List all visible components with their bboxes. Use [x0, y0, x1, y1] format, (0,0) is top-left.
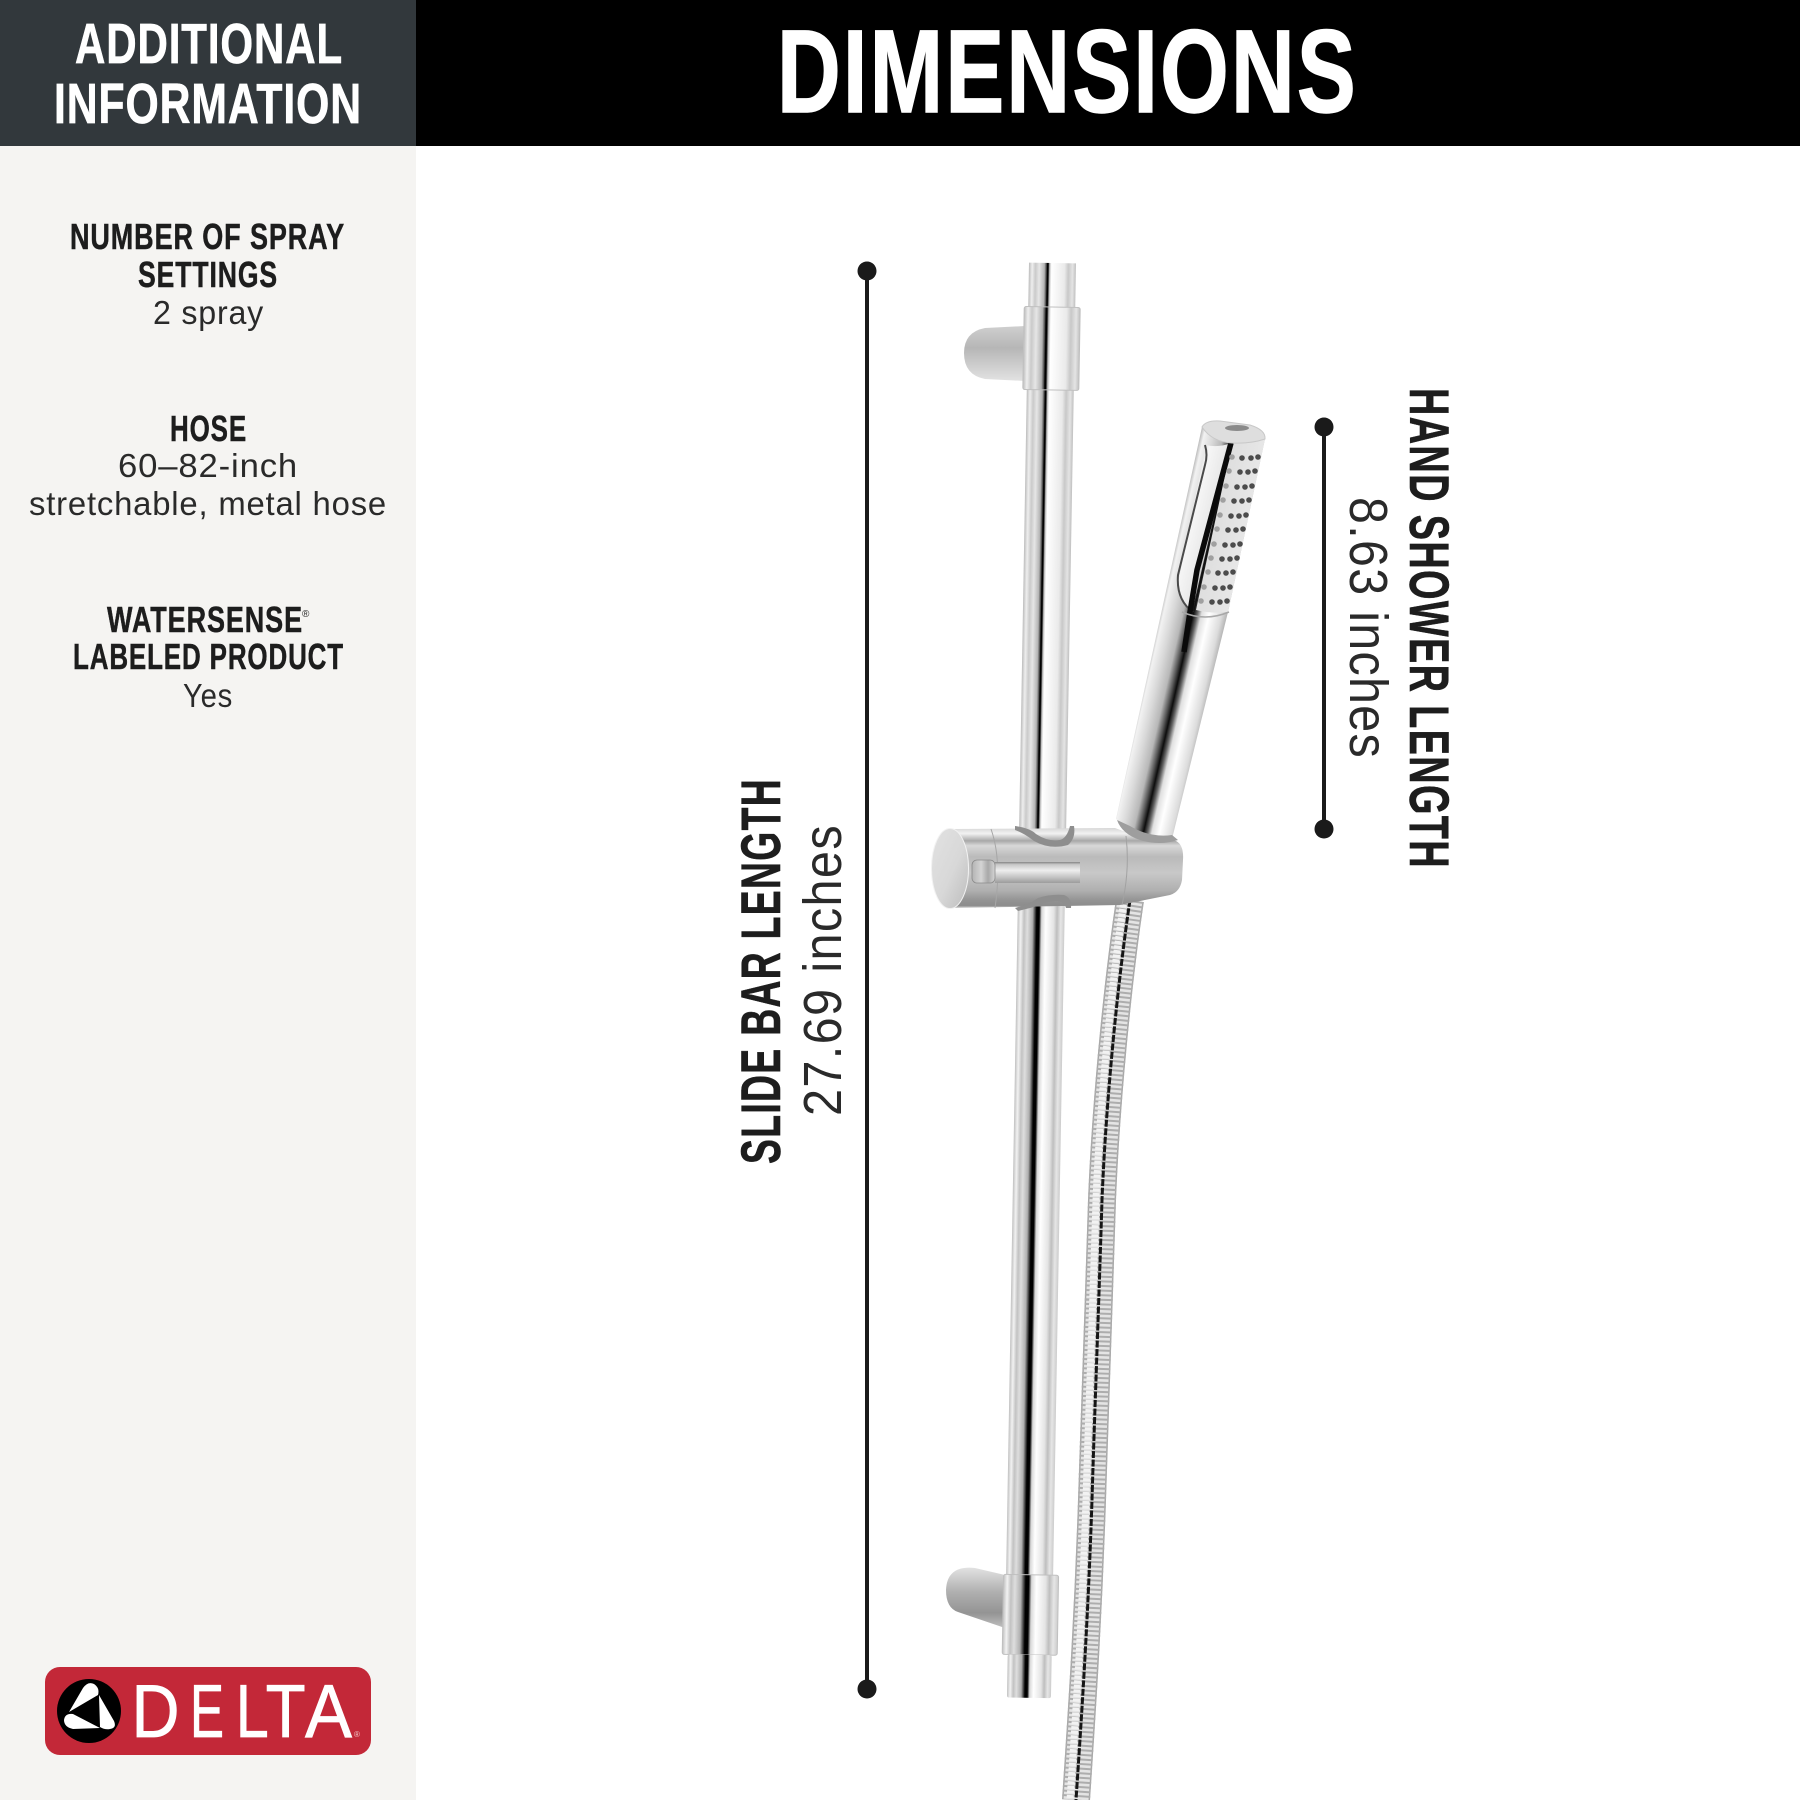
hand shower [1116, 421, 1265, 839]
metal hose [1070, 900, 1130, 1800]
heading: additional information: ADDITIONAL [75, 12, 343, 76]
label: slide bar length: SLIDE BAR LENGTH [729, 778, 792, 1164]
heading: additional information: INFORMATION [54, 72, 362, 136]
dimension line: slide bar length [858, 262, 876, 1698]
logo: delta: D [132, 1669, 180, 1753]
lever tab [972, 860, 995, 883]
spec: number of spray settings: NUMBER OF SPRAY [70, 216, 345, 257]
header band: dimensions [416, 0, 1800, 146]
header band: additional information [0, 0, 416, 146]
spec: watersense labeled product: ® [302, 609, 310, 620]
clamp notch around slide bar [1015, 826, 1074, 847]
heading: additional information [54, 12, 362, 136]
top end cap [1202, 421, 1265, 443]
spec: hose: stretchable, metal hose [29, 485, 387, 522]
spec: watersense labeled product: WATERSENSE [107, 599, 303, 640]
slider lever [995, 862, 1080, 883]
clamp end cap [932, 828, 968, 908]
spray face [1196, 439, 1265, 613]
logo: delta [45, 1667, 371, 1755]
slide bar with collars [1000, 263, 1081, 1698]
spec: number of spray settings: SETTINGS [138, 254, 278, 295]
logo: delta: E [190, 1669, 224, 1753]
wall bracket: top [964, 326, 1025, 381]
spec: number of spray settings [70, 216, 345, 331]
wall bracket: bottom [946, 1568, 1005, 1628]
logo: delta: L [236, 1669, 269, 1753]
product: slide bar shower set [932, 263, 1265, 1800]
sliding clamp [932, 820, 1183, 911]
spec: watersense labeled product: LABELED PRODUCT [73, 636, 344, 677]
spray button [1178, 443, 1231, 612]
spec: number of spray settings: 2 spray [153, 294, 264, 331]
spec: watersense labeled product: Yes [183, 677, 233, 714]
dimension line: hand shower length [1314, 418, 1334, 838]
spec: hose: HOSE [170, 408, 247, 449]
value: 8.63 inches: 8.63 inches [1338, 497, 1398, 759]
logo: delta: A [305, 1669, 352, 1753]
value: 27.69 inches: 27.69 inches [793, 824, 853, 1116]
spec: watersense labeled product [73, 599, 344, 714]
logo: delta: ® [354, 1730, 361, 1739]
title: dimensions: DIMENSIONS [777, 6, 1358, 138]
panel: additional information sidebar [0, 146, 416, 1800]
label: hand shower length: HAND SHOWER LENGTH [1398, 388, 1461, 869]
spec: hose [29, 408, 387, 522]
spec: hose: 60–82-inch [118, 447, 298, 484]
spray nozzles [1198, 454, 1261, 605]
hand shower socket ring [1117, 820, 1178, 843]
logo: delta: T [266, 1669, 306, 1753]
